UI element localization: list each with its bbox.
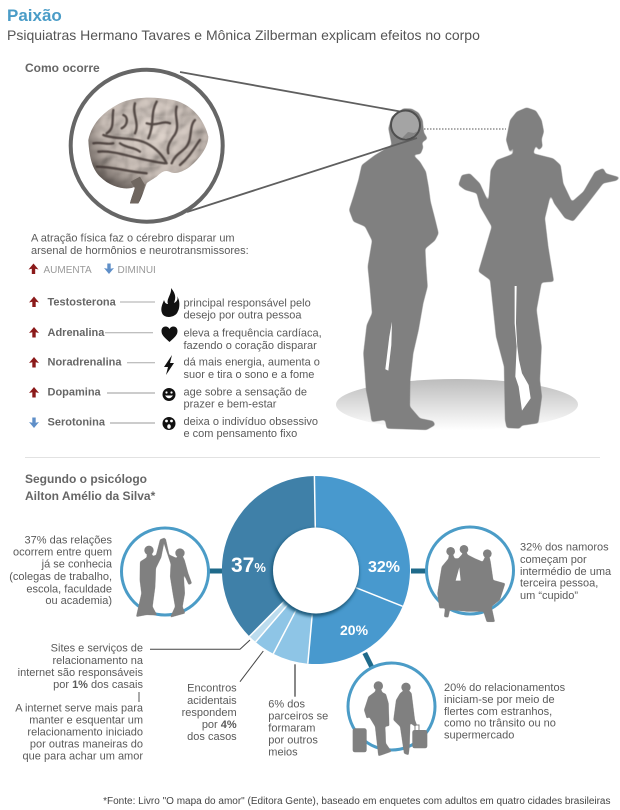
floor shadow ellipse	[336, 379, 578, 430]
text: 37%: escola, faculdade	[26, 583, 112, 595]
text: internet 1%: Sites e serviços de	[51, 643, 143, 655]
text: 20%: supermercado	[444, 730, 514, 742]
segment: 37%	[222, 476, 315, 636]
connectors to circles	[208, 568, 427, 668]
text: 32%: um “cupido”	[520, 590, 578, 602]
row: dopamina: age sobre a sensação de	[184, 386, 307, 398]
row: testosterona: principal responsável pelo	[184, 298, 311, 310]
segment: 1%	[249, 600, 288, 642]
row: noradrenalina: dá mais energia, aumenta o	[184, 356, 320, 368]
silhouette: man	[349, 108, 439, 430]
dotted line between heads	[424, 128, 506, 130]
legend: DIMINUI	[118, 265, 156, 276]
segment: 4%	[256, 604, 296, 654]
row: adrenalina: eleva a frequência cardíaca,	[184, 328, 322, 340]
text: 6%: parceiros se	[268, 710, 328, 722]
text: internet 1%: internet são responsáveis	[18, 667, 143, 679]
legend	[28, 264, 156, 276]
row: testosterona: desejo por outra pessoa	[184, 310, 302, 322]
text: 32%: terceira pessoa,	[520, 578, 598, 590]
legend: AUMENTA	[44, 265, 92, 276]
icon: flame	[161, 288, 179, 317]
heading: segundo o psicólogo: Ailton Amélio da Silva*	[25, 489, 156, 503]
zoom lines to brain	[180, 72, 417, 212]
footer source: *Fonte: Livro "O mapa do amor" (Editora Gente), baseado em enquetes com adultos em quatro cidades brasileiras	[103, 796, 610, 807]
text: internet 1%: por 1% dos casais	[53, 679, 143, 691]
text: internet 1%: que para achar um amor	[23, 750, 143, 762]
text: 37%: já se conhecia	[41, 559, 113, 571]
icon: brain	[88, 98, 208, 203]
connector: 1%	[150, 640, 250, 649]
text: 32%: 32% dos namoros	[520, 542, 609, 554]
silhouette: woman	[458, 107, 620, 429]
text: 32%: intermédio de uma	[520, 566, 612, 578]
text: encontros 4%: acidentais	[187, 695, 237, 707]
row: adrenalina: fazendo o coração disparar	[184, 340, 317, 352]
text: 37%: ocorrem entre quem	[13, 547, 112, 559]
heading: segundo o psicólogo: Segundo o psicólogo	[25, 472, 147, 486]
title: Paixão	[7, 6, 62, 25]
text: internet 1%: manter e esquentar um	[29, 714, 143, 726]
row: serotonina	[29, 416, 318, 440]
label: 20%: 20%	[340, 622, 369, 638]
row: testosterona	[29, 288, 311, 322]
label: 37%: 37%	[231, 554, 266, 577]
icon: heart	[162, 327, 178, 342]
text: 37%: 37% das relações	[25, 534, 112, 546]
row: noradrenalina: Noradrenalina	[48, 356, 122, 368]
row: dopamina: Dopamina	[48, 386, 102, 398]
text: 20%	[444, 682, 566, 742]
text: encontros 4%: por 4%	[202, 719, 237, 731]
donut chart	[222, 476, 410, 664]
text: internet 1%: relacionamento iniciado	[27, 727, 143, 739]
text: 6%: 6% dos	[268, 698, 305, 710]
row: noradrenalina	[29, 355, 320, 381]
row: serotonina: deixa o indivíduo obsessivo	[184, 416, 318, 428]
text: internet 1%: por outras maneiras do	[30, 738, 143, 750]
circle: three people (cupid)	[426, 527, 514, 622]
heading: segundo o psicólogo	[25, 472, 156, 503]
intro text: A atração física faz o cérebro disparar um	[31, 232, 235, 244]
text: 37%	[9, 534, 113, 607]
segment: 6%	[273, 609, 312, 664]
icon: smiling face	[162, 388, 176, 401]
text: internet 1%: relacionamento na	[52, 655, 144, 667]
text: 32%	[520, 542, 612, 602]
row: dopamina: prazer e bem-estar	[184, 398, 277, 410]
subtitle: Psiquiatras Hermano Tavares e Mônica Zilberman explicam efeitos no corpo	[7, 27, 480, 43]
connector: 4%	[240, 651, 263, 682]
text: 20%: flertes com estranhos,	[444, 706, 552, 718]
text: encontros 4%	[182, 683, 237, 743]
heading: como ocorre: Como ocorre	[25, 61, 100, 75]
row: adrenalina	[29, 327, 322, 352]
text: 37%: (colegas de trabalho,	[9, 571, 112, 583]
segment: 32%	[314, 476, 410, 606]
text: internet 1%	[15, 643, 144, 762]
intro text: arsenal de hormônios e neurotransmissores:	[31, 245, 249, 257]
intro text	[31, 232, 249, 257]
head lens	[391, 110, 420, 140]
row: dopamina	[29, 386, 307, 410]
text: 37%: ou academia)	[45, 595, 112, 607]
connector: 6%	[294, 664, 296, 697]
icon: lightning bolt	[164, 355, 174, 375]
row: adrenalina: Adrenalina	[48, 327, 105, 339]
text: 20%: 20% do relacionamentos	[444, 682, 566, 694]
row: noradrenalina: suor e tira o sono e a fome	[184, 369, 314, 381]
text: encontros 4%: dos casos	[187, 731, 237, 743]
row: serotonina: e com pensamento fixo	[184, 428, 297, 440]
text: 6%: formaram	[268, 723, 315, 735]
row: serotonina: Serotonina	[48, 416, 106, 428]
text: 32%: começam por	[520, 554, 587, 566]
circle: travellers (strangers)	[348, 663, 435, 756]
segment: 20%	[308, 588, 403, 664]
text: internet 1%: A internet serve mais para	[15, 703, 144, 715]
text: encontros 4%: respondem	[182, 707, 237, 719]
text: 20%: iniciam-se por meio de	[444, 694, 555, 706]
text: 20%: como no trânsito ou no	[444, 718, 556, 730]
row: testosterona: Testosterona	[48, 296, 117, 308]
icon: shocked face	[162, 417, 176, 430]
text: 6%: meios	[268, 747, 298, 759]
text: 6%: por outros	[268, 734, 318, 746]
label: 32%: 32%	[368, 559, 400, 576]
brain lens circle	[71, 70, 223, 222]
circle: people who already knew each other	[122, 528, 208, 618]
text: encontros 4%: Encontros	[187, 683, 237, 695]
text: 6%	[268, 698, 328, 759]
